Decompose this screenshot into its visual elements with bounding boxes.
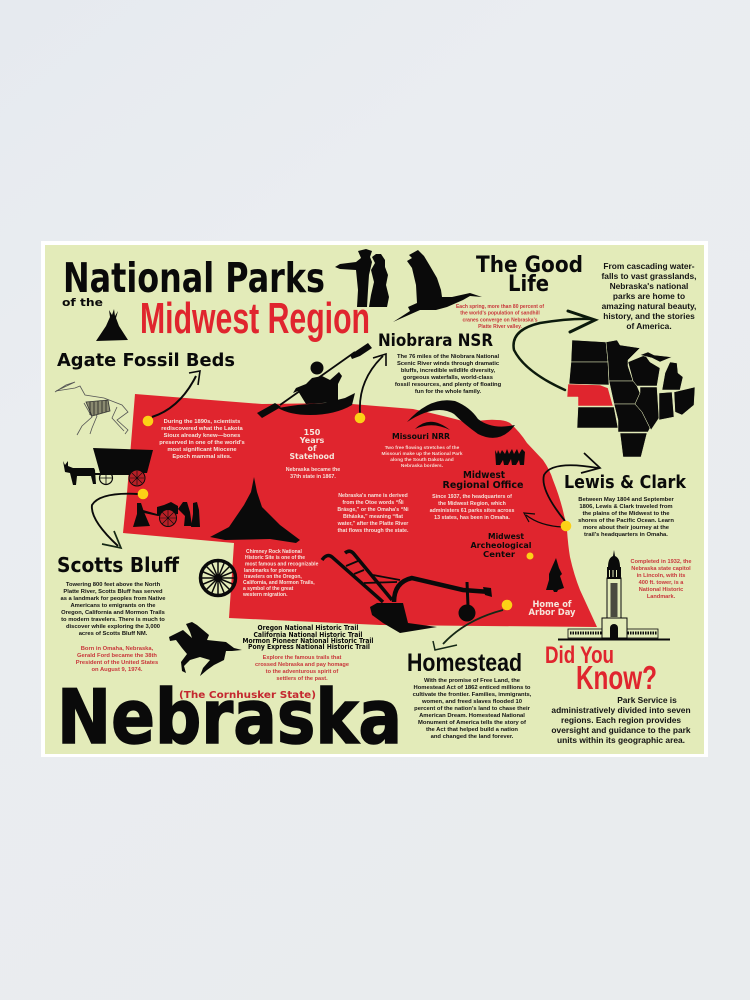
icon: Nebraska State Capitol [558, 550, 670, 640]
heading: Niobrara NSR: Niobrara NSR [378, 331, 493, 351]
text: Midwest Regional Office description: administers 61 parks sites across [430, 508, 514, 514]
text: Nebraska name origin: from the Otoe words “Ñi [342, 499, 404, 506]
arrow: Good Life to Midwest map [514, 311, 595, 390]
text: Niobrara description: Scenic River winds through dramatic [397, 361, 500, 367]
text: Homestead description: Monument of America tells the story of [418, 720, 526, 726]
title: National Parks: National Parks [63, 254, 325, 302]
text: Missouri description: Two free flowing stretches of the [385, 445, 460, 451]
text: Nebraska name origin: Brásge,” or the Omaha's “Ni [337, 507, 409, 513]
text: historic trails list: Mormon Pioneer National Historic Trail [242, 637, 374, 645]
text: Agate fossil description: preserved in one of the world's [159, 440, 245, 446]
text: Missouri description: along the South Dakota and [390, 457, 454, 463]
text: Niobrara description: fun for the whole family. [415, 389, 482, 395]
text: Lewis and Clark description: the plains of the Midwest to the [582, 511, 670, 517]
text: Agate fossil description: Sioux already knew—bones [164, 433, 240, 439]
icon: handcart pioneers [133, 502, 200, 527]
text: trails description: settlers of the past. [276, 676, 328, 682]
text: Homestead description: Homestead Act of 1862 enticed millions to [413, 685, 531, 691]
text: historic trails list [242, 624, 374, 651]
midwest states map [567, 340, 695, 457]
heading: Homestead: Homestead [407, 649, 522, 677]
text: Chimney Rock description: Chimney Rock National [246, 549, 302, 555]
heading: 150 Years of Statehood: Years [299, 436, 325, 445]
heading: 150 Years of Statehood: Statehood [290, 452, 335, 461]
icon: Lewis and Clark figures [335, 249, 389, 307]
text: Chimney Rock description: California, and Mormon Trails, [243, 580, 315, 586]
text: Scotts Bluff description: Americans to emigrants on the [70, 603, 156, 609]
pointer dot and arrow: Scotts Bluff [92, 489, 148, 548]
text: Chimney Rock description: western migration. [242, 592, 288, 598]
text: capitol fact: Landmark. [647, 594, 676, 600]
text: capitol fact: Nebraska state capitol [631, 566, 691, 572]
text: Did You Know description: regions. Each region provides [561, 715, 681, 725]
heading: Missouri NRR: Missouri NRR [392, 432, 450, 441]
text: Niobrara description: The 76 miles of the Niobrara National [397, 354, 499, 360]
text: Lewis and Clark description: shores of the Pacific Ocean. Learn [578, 518, 674, 524]
heading: The Good Life [476, 253, 583, 297]
heading: Midwest Regional Office: Regional Office [442, 480, 524, 491]
pointer dot: Archeological Center [526, 552, 534, 560]
text: Homestead description: and changed the land forever. [431, 734, 514, 740]
pointer dot and arrow: Agate [143, 371, 200, 426]
subtitle: of the: of the [62, 296, 103, 309]
pointer dot and arrow: Niobrara [355, 354, 386, 423]
text: Homestead description: women, and freed slaves flooded 10 [421, 699, 523, 705]
text: Scotts Bluff description: as a landmark for peoples from Native [60, 596, 166, 602]
text: Lewis and Clark description: 1806, Lewis & Clark traveled from [579, 504, 673, 510]
text: historic trails list: California National Historic Trail [254, 631, 362, 639]
text: Lewis and Clark description: Between May 1804 and September [578, 497, 674, 503]
text: Niobrara description: bluffs, incredible wildlife diversity, [401, 368, 496, 374]
text: statehood description: 37th state in 1867. [290, 474, 336, 480]
text: Did You Know description: Park Service is [617, 695, 677, 705]
text: Nebraska name origin: Nebraska's name is derived [338, 493, 408, 499]
heading: Did You Know?: Did You [545, 642, 614, 669]
pointer dot and arrow: Homestead [433, 600, 512, 650]
text: Scotts Bluff description: Platte River, Scotts Bluff has served [63, 589, 163, 595]
text: Niobrara description: gorgeous waterfalls, world-class [403, 375, 493, 381]
text: statehood description: Nebraska became the [286, 467, 340, 473]
Nebraska map [123, 394, 597, 627]
icon: Chimney Rock [210, 477, 300, 543]
heading: Midwest Archeological Center: Center [483, 550, 515, 559]
text: Gerald Ford fact: on August 9, 1974. [91, 667, 143, 673]
text: Gerald Ford fact: President of the United States [76, 660, 158, 666]
text: crane migration: Platte River valley. [478, 324, 523, 330]
heading: Did You Know? [545, 642, 657, 696]
text: crane migration: the world's population of sandhill [460, 311, 540, 317]
heading: Midwest Archeological Center: Midwest [488, 532, 524, 541]
text: Chimney Rock description: Historic Site is one of the [245, 555, 305, 561]
text: Did You Know description: administratively divided into seven [551, 705, 691, 715]
text: Lewis and Clark description: trail's headquarters in Omaha. [584, 532, 668, 538]
heading: Midwest Archeological Center [470, 532, 532, 559]
text: trails description: crossed Nebraska and pay homage [255, 662, 349, 668]
text: intro: From cascading water- [603, 261, 695, 271]
text: capitol fact: Completed in 1932, the [631, 559, 691, 565]
icon: covered wagon with ox [63, 448, 153, 486]
heading: Midwest Regional Office [442, 470, 524, 491]
text: historic trails list: Oregon National Historic Trail [258, 624, 358, 632]
text: Scotts Bluff description: Oregon, California and Mormon Trails [61, 610, 165, 616]
text: Chimney Rock description: travelers on the Oregon, [244, 574, 302, 580]
icon: kayaker [257, 343, 372, 418]
text: Gerald Ford fact: Gerald Ford became the 38th [77, 653, 157, 659]
icon: Pony Express rider [169, 622, 242, 676]
text: capitol fact: National Historic [639, 587, 683, 593]
text: Midwest Regional Office description: the Midwest Region, which [438, 501, 506, 507]
text: Agate fossil description: During the 1890s, scientists [164, 419, 240, 425]
poster frame [41, 241, 708, 757]
text: Scotts Bluff description: Towering 800 feet above the North [66, 582, 161, 588]
text: Chimney Rock description: landmarks for pioneer [244, 568, 297, 574]
heading: Did You Know?: Know? [576, 659, 657, 696]
text: Agate fossil description: most significant Miocene [167, 447, 237, 453]
text: Homestead description: American Dream. Homestead National [419, 713, 525, 719]
heading: Agate Fossil Beds: Agate Fossil Beds [57, 350, 235, 371]
pointer dot and arrows: Lewis and Clark [524, 453, 600, 531]
text: Nebraska name origin: water,” after the Platte River [337, 521, 408, 527]
text: Missouri description: Missouri make up the National Park [381, 451, 463, 457]
main title: Nebraska: Nebraska [57, 673, 402, 761]
text: Homestead description: With the promise of Free Land, the [424, 678, 521, 684]
text: Homestead description: the Act that helped build a nation [426, 727, 518, 733]
text: Did You Know description: oversight and guidance to the park [551, 725, 691, 735]
heading: Home of Arbor Day [528, 600, 576, 618]
text: intro: falls to vast grasslands, [602, 271, 696, 281]
text: trails description: Explore the famous trails that [263, 655, 341, 661]
text: Did You Know description: units within its geographic area. [557, 735, 685, 745]
icon: wagon wheel [200, 560, 236, 596]
icon: dancing figures [495, 449, 525, 465]
text: capitol fact: 400 ft. tower, is a [639, 580, 684, 586]
text: Chimney Rock description: most famous and recognizable [245, 562, 319, 568]
text: Gerald Ford fact: Born in Omaha, Nebraska, [81, 646, 154, 652]
text: capitol fact: in Lincoln, with its [637, 573, 685, 579]
text: trails description: to the adventurous spirit of [266, 669, 338, 675]
heading: 150 Years of Statehood: 150 [304, 428, 321, 437]
icon: Missouri river waves [407, 400, 515, 438]
text: intro: history, and the stories [603, 311, 695, 321]
text: intro: amazing natural beauty, [602, 301, 696, 311]
text: historic trails list: Pony Express National Historic Trail [248, 643, 370, 651]
text: Scotts Bluff description: to modern travelers. There is much to [61, 617, 165, 623]
icon: pine tree [546, 558, 564, 592]
subtitle: The Cornhusker State: (The Cornhusker State) [179, 690, 316, 701]
icon: sandhill crane [393, 250, 482, 322]
icon: horse skeleton [55, 382, 128, 435]
text: Nebraska name origin: Btháska,” meaning “flat [343, 514, 403, 520]
title: Midwest Region: Midwest Region [140, 294, 370, 343]
text: intro: of America. [626, 321, 672, 331]
poster background [45, 245, 704, 754]
text: Agate fossil description: rediscovered what the Lakota [161, 426, 244, 432]
heading: 150 Years of Statehood: of [308, 444, 317, 453]
text: crane migration: cranes converge on Nebraska's [462, 317, 538, 323]
heading: Home of Arbor Day: Home of [532, 600, 572, 610]
icon: tipi [96, 309, 128, 341]
text: intro: parks are home to [613, 291, 685, 301]
text: Midwest Regional Office description: Since 1937, the headquarters of [432, 494, 512, 500]
heading: Lewis and Clark: Lewis & Clark [564, 472, 687, 493]
heading: Scotts Bluff: Scotts Bluff [57, 553, 180, 577]
text: crane migration: Each spring, more than 80 percent of [456, 304, 544, 310]
text: Nebraska name origin: that flows through the state. [338, 528, 409, 534]
heading: Home of Arbor Day: Arbor Day [528, 608, 576, 618]
heading: 150 Years of Statehood [290, 428, 335, 461]
text: Scotts Bluff description: discover while exploring the 3,000 [66, 624, 160, 630]
text: Niobrara description: fossil resources, and plenty of floating [395, 382, 502, 388]
heading: The Good Life: Life [508, 272, 549, 297]
text: Chimney Rock description: a symbol of the great [243, 586, 294, 592]
text: Homestead description: percent of the nation's land to chase their [414, 706, 531, 712]
text: Lewis and Clark description: more about their journey at the [583, 525, 670, 531]
heading: Midwest Regional Office: Midwest [463, 470, 505, 481]
text: Agate fossil description: Epoch mammal sites. [172, 454, 232, 460]
heading: Midwest Archeological Center: Archeological [470, 541, 532, 550]
heading: The Good Life: The Good [476, 253, 583, 278]
icon: plow [322, 551, 492, 633]
text: intro: Nebraska's national [610, 281, 688, 291]
text: Homestead description: cultivate the frontier. Families, immigrants, [413, 692, 532, 698]
text: Scotts Bluff description: acres of Scotts Bluff NM. [79, 631, 148, 637]
text: Missouri description: Nebraska borders. [401, 463, 443, 469]
text: Midwest Regional Office description: 13 states, has been in Omaha. [434, 515, 510, 521]
